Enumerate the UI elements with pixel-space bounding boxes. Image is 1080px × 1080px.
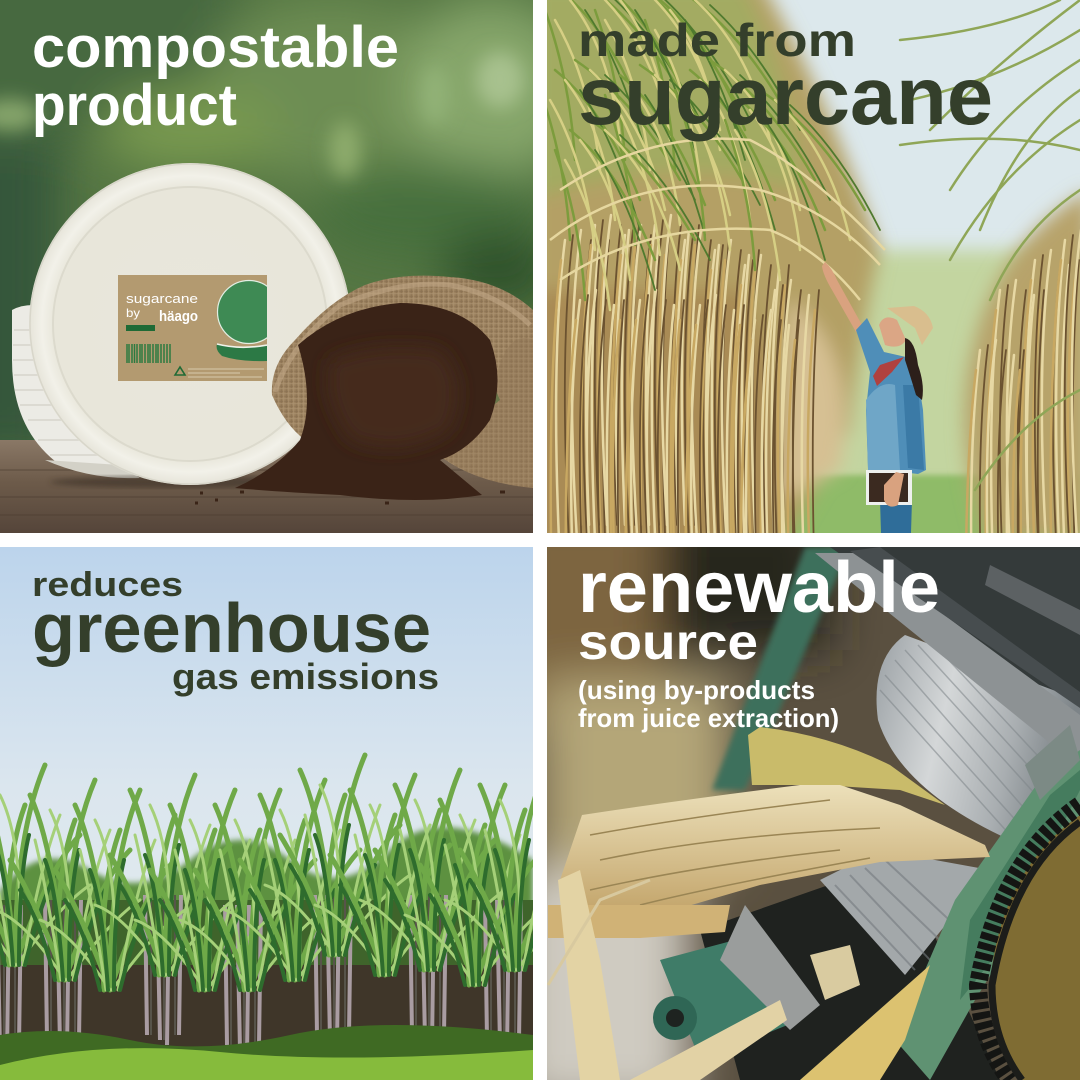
blurred foliage background (0, 0, 533, 440)
raised arm (822, 262, 862, 332)
burlap sack (272, 276, 533, 488)
shirt (856, 318, 926, 474)
sky (0, 547, 533, 900)
blurred workshop background (547, 547, 1018, 1080)
wooden table (0, 440, 533, 533)
heading: source (578, 614, 758, 670)
green machine frame back (653, 547, 1080, 1080)
label: barcode (127, 344, 170, 363)
panel: compostable product (0, 0, 580, 533)
panel: reduces greenhouse gas emissions (0, 547, 590, 1080)
heading: product (32, 73, 237, 138)
heading: compostable (32, 15, 399, 80)
heading: gas emissions (172, 656, 439, 697)
heading: renewable (578, 548, 940, 628)
cane leaves (0, 755, 590, 990)
metal tray (720, 905, 820, 1030)
label: brand text: häago (159, 308, 198, 325)
woman farmer (822, 262, 933, 533)
checked scarf (873, 357, 904, 386)
heading: (using by-products (578, 675, 815, 705)
stack of plates (12, 305, 140, 478)
hand (884, 472, 904, 507)
grass foreground (0, 1025, 533, 1080)
panel: renewable source (547, 547, 1080, 1080)
label: recycling mark (175, 367, 185, 375)
right sugarcane mass (898, 0, 1080, 533)
straw hat (887, 306, 933, 345)
heading: made from (578, 14, 856, 66)
label: green plates picture (216, 280, 267, 362)
label: brand text: sugarcane (126, 292, 198, 306)
panel: made from sugarcane (547, 0, 1080, 533)
green side frame (895, 725, 1080, 1080)
shadow under the plate (50, 476, 310, 488)
sky and meadow background (764, 0, 1080, 533)
heading: from juice extraction) (578, 703, 839, 733)
heading (578, 548, 940, 733)
label: brand text: by (126, 306, 140, 320)
label: brand text (126, 296, 198, 324)
tablet (866, 470, 912, 505)
label: small print (188, 369, 264, 377)
heading (32, 566, 439, 697)
heading: reduces (32, 566, 183, 604)
heading (32, 15, 399, 138)
steel rollers (820, 635, 1080, 975)
steel bar (815, 547, 1080, 768)
label: green tag (126, 325, 155, 331)
large white plate (29, 163, 351, 485)
soil pile (195, 303, 505, 503)
kraft product label (118, 275, 280, 381)
legs (880, 505, 912, 533)
cane stalks (0, 895, 533, 1055)
large black gear (978, 805, 1080, 1080)
heading: greenhouse (32, 589, 431, 667)
heading: sugarcane (578, 51, 993, 142)
left sugarcane mass (547, 0, 890, 533)
crushed sugarcane (548, 727, 990, 1080)
background foliage (0, 822, 533, 900)
head and ponytail (879, 317, 906, 347)
